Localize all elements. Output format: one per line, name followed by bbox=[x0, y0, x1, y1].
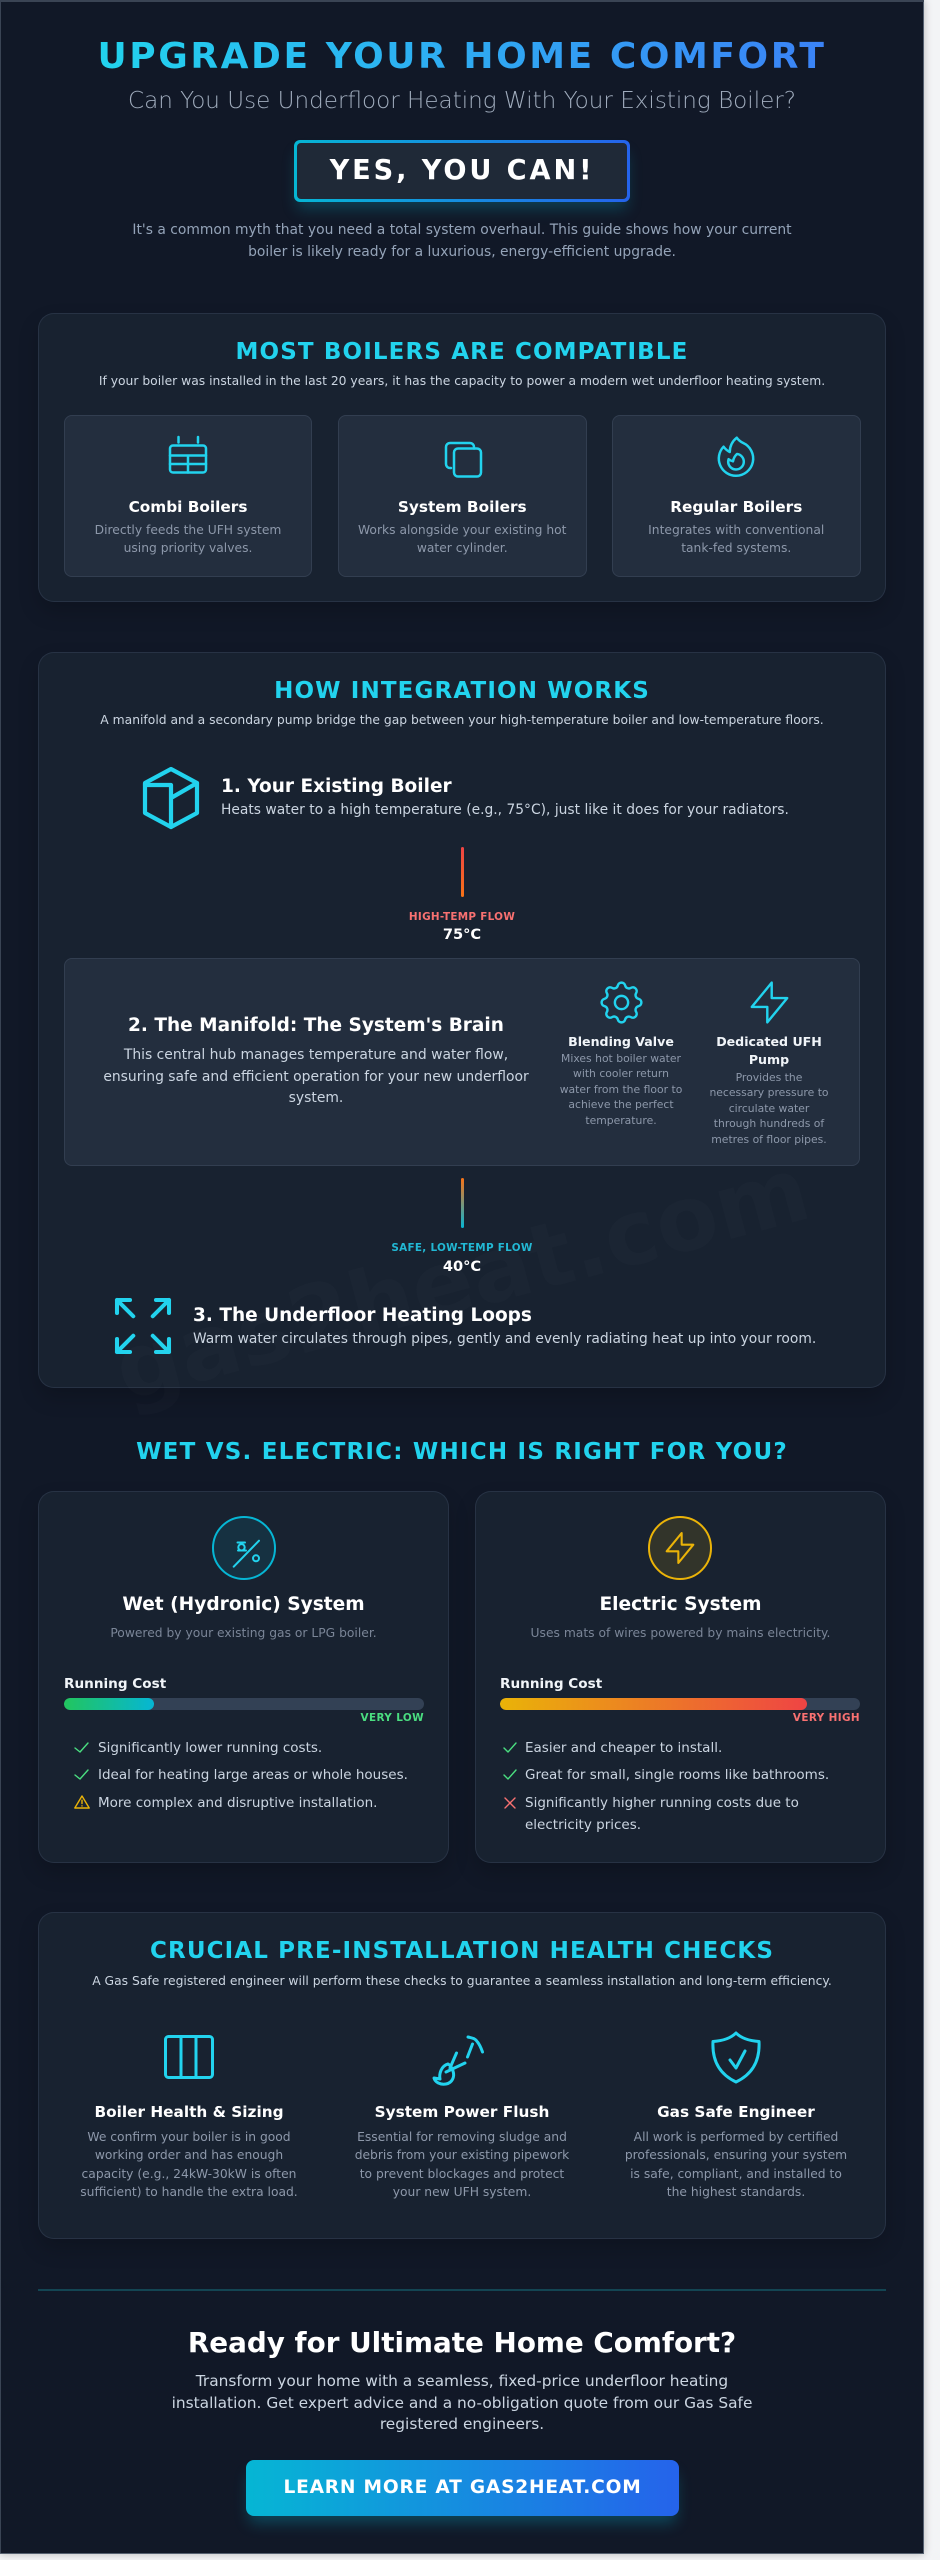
description bbox=[625, 2130, 847, 2199]
description: All work is performed by certified bbox=[634, 2130, 838, 2144]
card description: tank-fed systems. bbox=[681, 541, 791, 555]
wet title: Wet (Hydronic) System bbox=[122, 1594, 365, 1615]
card description bbox=[358, 523, 567, 555]
arrow: low temp flow line bbox=[460, 1178, 464, 1228]
yes you can badge bbox=[294, 140, 630, 202]
card description: using priority valves. bbox=[124, 541, 252, 555]
blending valve bbox=[560, 981, 682, 1127]
card description bbox=[648, 523, 824, 555]
description: debris from your existing pipework bbox=[355, 2148, 569, 2162]
item text: Significantly lower running costs. bbox=[98, 1740, 322, 1756]
icon: check bbox=[74, 1769, 89, 1780]
card: regular boilers bbox=[612, 415, 860, 577]
pump title bbox=[716, 1034, 822, 1067]
electric description: Uses mats of wires powered by mains electricity. bbox=[531, 1626, 830, 1640]
subtitle: Can You Use Underfloor Heating With Your Existing Boiler? bbox=[128, 88, 796, 114]
cta text: installation. Get expert advice and a no-obligation quote from our Gas Safe bbox=[172, 2394, 752, 2412]
very high label: VERY HIGH bbox=[793, 1712, 860, 1724]
heading: CRUCIAL PRE-INSTALLATION HEALTH CHECKS bbox=[150, 1938, 774, 1964]
step 3 title: 3. The Underfloor Heating Loops bbox=[193, 1305, 532, 1326]
wet description: Powered by your existing gas or LPG boiler. bbox=[110, 1626, 377, 1640]
pump description: metres of floor pipes. bbox=[711, 1133, 827, 1146]
pump title: Dedicated UFH bbox=[716, 1034, 822, 1049]
card title: System Boilers bbox=[398, 498, 527, 516]
comparison heading: WET VS. ELECTRIC: WHICH IS RIGHT FOR YOU? bbox=[136, 1439, 788, 1465]
arrow: high temp flow line bbox=[460, 847, 464, 897]
card description: Works alongside your existing hot bbox=[358, 523, 567, 537]
description: We confirm your boiler is in good bbox=[87, 2130, 291, 2144]
title: UPGRADE YOUR HOME COMFORT bbox=[97, 36, 826, 77]
card title: Regular Boilers bbox=[670, 498, 802, 516]
item text: More complex and disruptive installation. bbox=[98, 1795, 377, 1811]
icon: bolt in circle bbox=[648, 1516, 712, 1580]
dedicated ufh pump bbox=[709, 981, 829, 1146]
check: boiler health bbox=[80, 2035, 298, 2199]
cta text: registered engineers. bbox=[380, 2415, 544, 2433]
pump description: necessary pressure to bbox=[709, 1086, 829, 1099]
heading: MOST BOILERS ARE COMPATIBLE bbox=[236, 339, 688, 365]
heading: HOW INTEGRATION WORKS bbox=[274, 678, 650, 704]
description: Essential for removing sludge and bbox=[357, 2130, 567, 2144]
electric title: Electric System bbox=[599, 1594, 762, 1615]
yes you can badge: YES, YOU CAN! bbox=[330, 155, 594, 186]
icon: shield check bbox=[711, 2031, 761, 2084]
description: working order and has enough bbox=[95, 2148, 283, 2162]
panel: electric system bbox=[475, 1491, 886, 1863]
icon: check bbox=[503, 1769, 517, 1780]
list: wet pros and cons bbox=[74, 1740, 408, 1811]
item text: Ideal for heating large areas or whole houses. bbox=[98, 1767, 408, 1783]
description: is safe, compliant, and installed to bbox=[630, 2167, 842, 2181]
icon: percent in circle bbox=[212, 1516, 276, 1580]
description bbox=[80, 2130, 298, 2199]
manifold description: ensuring safe and efficient operation for your new underfloor bbox=[103, 1069, 529, 1085]
panel: wet system bbox=[38, 1491, 449, 1863]
card description: water cylinder. bbox=[417, 541, 508, 555]
card: system boilers bbox=[338, 415, 587, 577]
item text: Easier and cheaper to install. bbox=[525, 1740, 722, 1756]
icon: system boiler bbox=[444, 442, 482, 478]
cta text: Transform your home with a seamless, fixed-price underfloor heating bbox=[196, 2372, 728, 2390]
icon: brush bbox=[432, 2036, 484, 2086]
card description: Integrates with conventional bbox=[648, 523, 824, 537]
card: combi boilers bbox=[64, 415, 312, 577]
bar fill 25 percent bbox=[64, 1698, 154, 1710]
subheading: A Gas Safe registered engineer will perform these checks to guarantee a seamless installation and long-term efficiency. bbox=[92, 1974, 832, 1988]
step 1 description: Heats water to a high temperature (e.g., 75°C), just like it does for your radiators. bbox=[221, 802, 789, 818]
icon: columns bbox=[164, 2035, 214, 2079]
cta button bbox=[246, 2460, 679, 2516]
icon: cross bbox=[504, 1797, 516, 1809]
icon: gear bbox=[600, 981, 643, 1024]
cta heading: Ready for Ultimate Home Comfort? bbox=[188, 2326, 736, 2359]
item text: Great for small, single rooms like bathrooms. bbox=[525, 1767, 829, 1783]
check: gas safe engineer bbox=[625, 2031, 847, 2199]
icon: underfloor loops expand arrows bbox=[114, 1298, 172, 1354]
high temp label: HIGH-TEMP FLOW bbox=[409, 911, 515, 923]
description: capacity (e.g., 24kW-30kW is often bbox=[82, 2167, 296, 2181]
title: Boiler Health & Sizing bbox=[94, 2103, 284, 2121]
pump description: Provides the bbox=[736, 1071, 802, 1084]
watermark: gas2heat.com bbox=[104, 1136, 820, 1423]
manifold description bbox=[103, 1047, 529, 1106]
icon: bolt bbox=[750, 981, 788, 1024]
panel: health checks bbox=[38, 1912, 886, 2239]
title: System Power Flush bbox=[375, 2103, 549, 2121]
low temp label: SAFE, LOW-TEMP FLOW bbox=[391, 1242, 533, 1254]
blending valve description: achieve the perfect bbox=[568, 1098, 674, 1111]
very low label: VERY LOW bbox=[361, 1712, 424, 1724]
running cost bar bbox=[64, 1698, 424, 1710]
card description bbox=[95, 523, 281, 555]
pump description: through hundreds of bbox=[714, 1117, 824, 1130]
description bbox=[355, 2130, 570, 2199]
step 3 description: Warm water circulates through pipes, gently and evenly radiating heat up into your room. bbox=[193, 1331, 816, 1347]
running cost label: Running Cost bbox=[64, 1676, 166, 1692]
title: Gas Safe Engineer bbox=[657, 2103, 815, 2121]
card description: Directly feeds the UFH system bbox=[95, 523, 281, 537]
description: the highest standards. bbox=[667, 2185, 805, 2199]
check: power flush bbox=[355, 2036, 570, 2199]
intro text: It's a common myth that you need a total system overhaul. This guide shows how your current bbox=[132, 222, 792, 238]
icon: combi boiler bbox=[168, 436, 208, 474]
manifold description: system. bbox=[289, 1090, 343, 1106]
blending valve description: with cooler return bbox=[573, 1067, 669, 1080]
cta text bbox=[172, 2372, 752, 2433]
75 degrees value: 75°C bbox=[443, 926, 481, 943]
pump title: Pump bbox=[749, 1052, 789, 1067]
blending valve description: Mixes hot boiler water bbox=[561, 1052, 681, 1065]
icon: flame bbox=[718, 436, 754, 477]
intro text: boiler is likely ready for a luxurious, energy-efficient upgrade. bbox=[248, 244, 676, 260]
panel: manifold bbox=[64, 958, 860, 1166]
list: electric pros and cons bbox=[503, 1740, 829, 1833]
intro text bbox=[132, 222, 792, 260]
running cost label: Running Cost bbox=[500, 1676, 602, 1692]
panel: how integration works bbox=[38, 652, 886, 1388]
icon: check bbox=[503, 1742, 517, 1753]
card title: Combi Boilers bbox=[129, 498, 247, 516]
panel: most boilers are compatible bbox=[38, 313, 886, 602]
manifold description: This central hub manages temperature and water flow, bbox=[124, 1047, 508, 1063]
pump description: circulate water bbox=[729, 1102, 809, 1115]
running cost bar bbox=[500, 1698, 860, 1710]
step 1 title: 1. Your Existing Boiler bbox=[221, 776, 452, 797]
icon: boiler cube bbox=[142, 766, 200, 830]
manifold title: 2. The Manifold: The System's Brain bbox=[128, 1015, 504, 1036]
description: your new UFH system. bbox=[393, 2185, 531, 2199]
pump description bbox=[709, 1071, 829, 1146]
button label: LEARN MORE AT GAS2HEAT.COM bbox=[283, 2477, 642, 2498]
item text bbox=[525, 1795, 799, 1833]
blending valve description: water from the floor to bbox=[560, 1083, 682, 1096]
description: sufficient) to handle the extra load. bbox=[80, 2185, 298, 2199]
item text: Significantly higher running costs due to bbox=[525, 1795, 799, 1811]
blending valve title: Blending Valve bbox=[568, 1034, 674, 1049]
40 degrees value: 40°C bbox=[443, 1258, 481, 1275]
item text: electricity prices. bbox=[525, 1817, 641, 1833]
description: professionals, ensuring your system bbox=[625, 2148, 847, 2162]
description: to prevent blockages and protect bbox=[360, 2167, 564, 2181]
icon: warning triangle bbox=[74, 1795, 90, 1809]
icon: check bbox=[74, 1742, 89, 1753]
subheading: A manifold and a secondary pump bridge the gap between your high-temperature boiler and low-temperature floors. bbox=[100, 713, 824, 727]
blending valve description: temperature. bbox=[585, 1114, 657, 1127]
blending valve description bbox=[560, 1052, 682, 1127]
subheading: If your boiler was installed in the last 20 years, it has the capacity to power a modern wet underfloor heating system. bbox=[99, 374, 825, 388]
bar fill 85 percent bbox=[500, 1698, 807, 1710]
